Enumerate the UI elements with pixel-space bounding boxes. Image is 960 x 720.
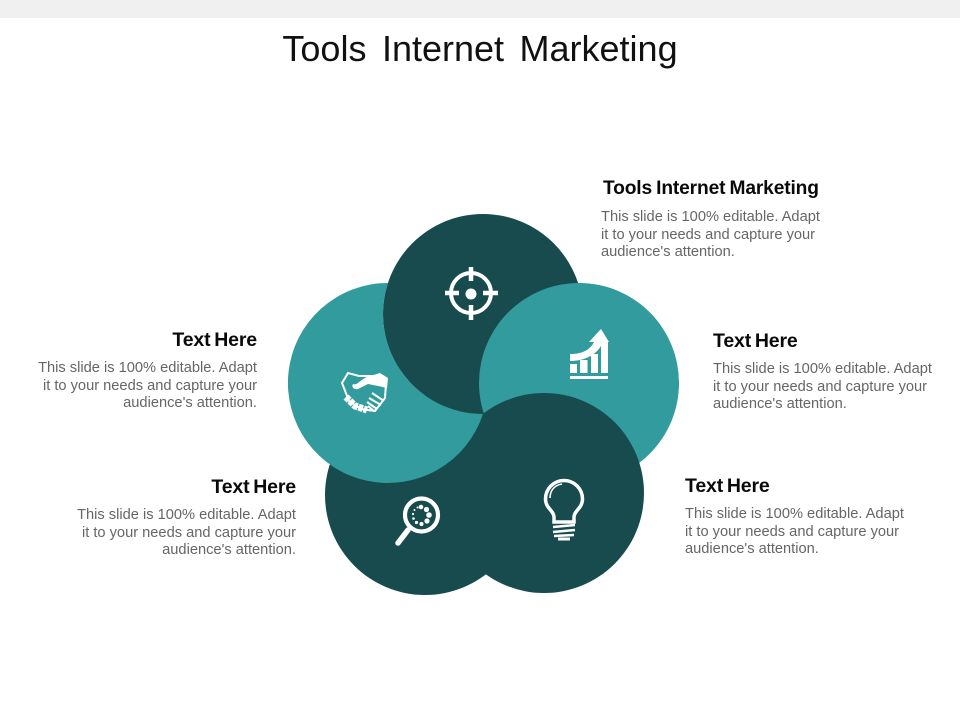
text block: tools internet marketing: audience's attention. (601, 244, 735, 260)
text block: left lower: This slide is 100% editable. Adapt (77, 507, 296, 523)
text block: right lower: This slide is 100% editable. Adapt (685, 506, 904, 522)
text block: left upper: This slide is 100% editable. Adapt (38, 360, 257, 376)
text block: left lower: it to your needs and capture your (82, 524, 296, 540)
text block: right lower: audience's attention. (685, 541, 819, 557)
text block: tools internet marketing: it to your needs and capture your (601, 226, 815, 242)
text block: left lower: Text Here (211, 476, 296, 498)
circle: bottom left (325, 395, 525, 595)
icon: magnifier (398, 498, 438, 543)
circle: right (479, 283, 679, 483)
text block: left upper (38, 329, 257, 411)
circle: top (383, 214, 583, 414)
icon: target (445, 267, 498, 320)
text block: left upper: audience's attention. (123, 395, 257, 411)
text block: right lower: Text Here (685, 475, 770, 497)
text block: right upper: This slide is 100% editable. Adapt (713, 361, 932, 377)
text block: tools internet marketing: Tools Internet Marketing (603, 178, 819, 199)
circle: left (288, 283, 483, 483)
text block: right lower: it to your needs and capture your (685, 524, 899, 540)
text block: tools internet marketing (601, 178, 820, 260)
text block: right upper: Text Here (713, 330, 798, 352)
title: Tools Internet Marketing (282, 28, 678, 69)
icon: light bulb (546, 480, 582, 539)
circle: bottom right (444, 393, 644, 593)
text block: right lower (685, 475, 904, 557)
text block: tools internet marketing: This slide is 100% editable. Adapt (601, 209, 820, 225)
text block: right upper (713, 330, 932, 412)
text block: left upper: it to your needs and capture your (43, 378, 257, 394)
text block: left lower: audience's attention. (162, 542, 296, 558)
icon: growth chart (570, 329, 609, 379)
text block: right upper: audience's attention. (713, 396, 847, 412)
icon: handshake (342, 373, 388, 411)
text block: left upper: Text Here (172, 329, 257, 351)
text block: right upper: it to your needs and capture your (713, 378, 927, 394)
text block: left lower (77, 476, 296, 558)
